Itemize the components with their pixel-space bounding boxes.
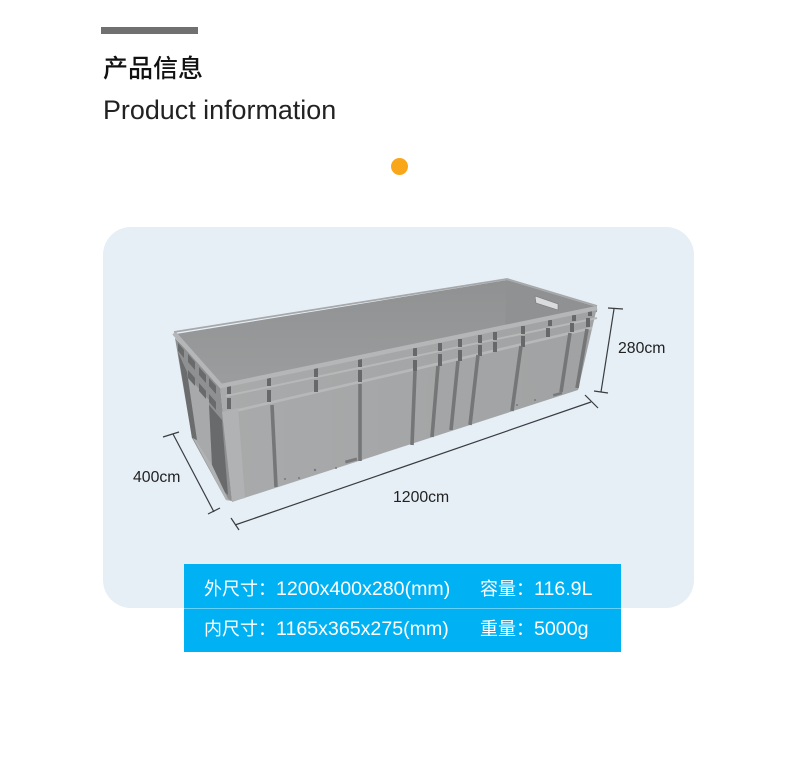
crate base fixings: [284, 392, 562, 480]
title: english heading: Product information: [103, 95, 336, 125]
row divider: [184, 608, 621, 609]
dimension line: height 280cm: [594, 308, 623, 393]
crate band dividers: [229, 311, 590, 409]
spec: outer size: 外尺寸：1200x400x280(mm): [204, 578, 450, 600]
panel: product background: [103, 227, 694, 608]
spec: weight: 重量：5000g: [480, 618, 588, 640]
crate rim: [174, 279, 597, 386]
dimension line: depth 400cm: [163, 432, 220, 514]
spec: capacity: 容量：116.9L: [480, 578, 592, 600]
crate left end face: [175, 338, 232, 501]
label: length: 1200cm: [393, 489, 449, 506]
spec: inner size: 内尺寸：1165x365x275(mm): [204, 618, 449, 640]
crate lower left corner post: [222, 408, 245, 501]
spec table: [184, 564, 621, 652]
heading accent bar: [101, 27, 198, 34]
crate handle slot: [535, 296, 558, 310]
crate upper bands: [226, 318, 597, 413]
title: chinese heading: 产品信息: [103, 55, 203, 83]
crate front face: [220, 307, 597, 502]
crate inner long wall: [176, 280, 507, 388]
dimension line: length 1200cm: [231, 395, 598, 530]
label: height: 280cm: [618, 340, 665, 357]
crate vertical ribs: [272, 329, 587, 487]
icon: plastic crate: [174, 279, 597, 502]
orange dot: [391, 158, 408, 175]
crate inner end wall: [505, 280, 597, 330]
label: depth: 400cm: [133, 469, 180, 486]
